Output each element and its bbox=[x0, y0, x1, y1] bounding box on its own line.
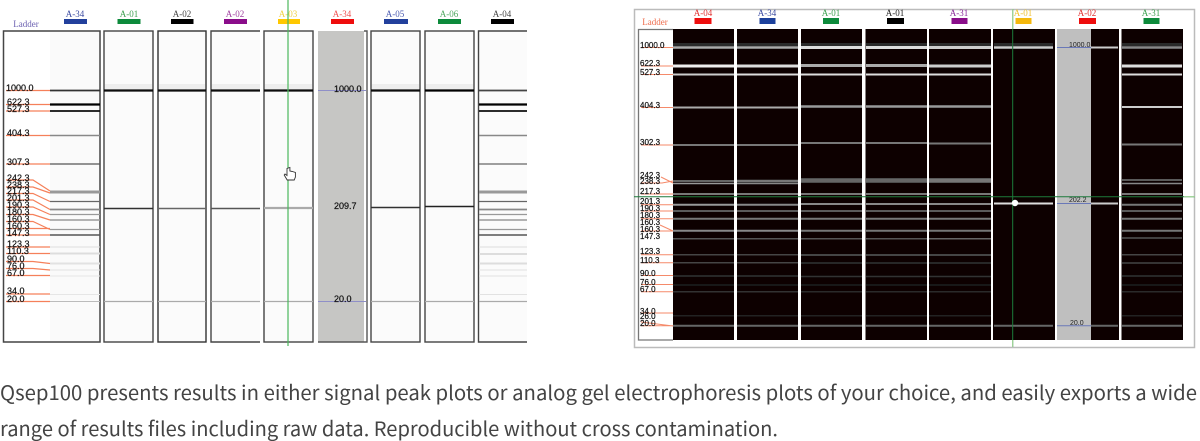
lane header A-06 green: A-06 bbox=[440, 9, 459, 19]
lane: dark A-31 purple bbox=[929, 29, 991, 340]
size labels and leader lines: 190.3 bbox=[7, 200, 30, 210]
ladder box with size labels: 404.3 bbox=[640, 101, 661, 110]
icon: cursor marker dot bbox=[1012, 200, 1018, 206]
lane: A-04 black ladder bbox=[478, 31, 527, 342]
lane header A-04 red: A-04 bbox=[694, 8, 713, 18]
ladder heading: Ladder bbox=[13, 19, 39, 29]
size labels and leader lines: 622.3 bbox=[7, 97, 30, 107]
lane header A-34 blue: A-34 bbox=[66, 9, 85, 19]
lane header A-02 purple: A-02 bbox=[226, 9, 244, 19]
size labels and leader lines: 90.0 bbox=[7, 254, 25, 264]
lane header A-34 blue bbox=[758, 8, 777, 24]
ladder box with size labels: 160.3 bbox=[640, 218, 661, 227]
cursor line: green vertical bbox=[287, 0, 289, 346]
size labels and leader lines: 160.3 bbox=[7, 214, 30, 224]
lane header A-34 red bbox=[331, 9, 354, 24]
ladder box with size labels: 76.0 bbox=[640, 278, 656, 287]
lane header A-06 green bbox=[438, 9, 461, 24]
lane header A-01 yellow: A-01 bbox=[1014, 8, 1032, 18]
lane header A-34 blue bbox=[64, 9, 87, 24]
lane: selected A-02 red with size markers: 202.2 bbox=[1069, 197, 1087, 204]
ladder box with size labels: 34.0 bbox=[640, 307, 656, 316]
size labels and leader lines: 20.0 bbox=[7, 294, 25, 304]
lane header A-01 black: A-01 bbox=[886, 8, 904, 18]
lane: dark A-01 yellow bbox=[993, 29, 1055, 340]
size labels and leader lines: 180.3 bbox=[7, 207, 30, 217]
lane header A-04 black bbox=[491, 9, 514, 24]
lane header A-01 green: A-01 bbox=[822, 8, 840, 18]
ladder box with size labels: 217.3 bbox=[640, 187, 661, 196]
size labels and leader lines: 527.3 bbox=[7, 104, 30, 114]
panel frame bbox=[634, 10, 1194, 348]
ladder box with size labels: 527.3 bbox=[640, 68, 661, 77]
lane header A-02 black: A-02 bbox=[173, 9, 191, 19]
size labels and leader lines: 67.0 bbox=[7, 268, 25, 278]
size labels and leader lines: 217.3 bbox=[7, 186, 30, 196]
lane header A-01 green bbox=[822, 8, 840, 24]
lane header A-02 purple bbox=[224, 9, 247, 24]
panel: dark gel view bbox=[634, 8, 1195, 348]
lane header A-34 blue: A-34 bbox=[758, 8, 777, 18]
size labels and leader lines: 1000.0 bbox=[6, 83, 34, 93]
panel: white gel view bbox=[4, 0, 527, 346]
size labels and leader lines: 201.3 bbox=[7, 193, 30, 203]
ladder box with size labels: 160.3 bbox=[640, 225, 661, 234]
ladder box with size labels: 26.0 bbox=[640, 312, 656, 321]
lane header A-04 red bbox=[694, 8, 713, 24]
lane header A-02 red: A-02 bbox=[1078, 8, 1096, 18]
lane: A-06 green bbox=[425, 31, 474, 342]
ladder box with size labels: 110.3 bbox=[640, 256, 660, 265]
size labels and leader lines: 147.3 bbox=[7, 228, 30, 238]
lane header A-05 blue: A-05 bbox=[386, 9, 405, 19]
lane header A-31 green: A-31 bbox=[1142, 8, 1160, 18]
ladder box with size labels bbox=[638, 30, 673, 340]
ladder box with size labels: 147.3 bbox=[640, 232, 661, 241]
caption text bbox=[0, 377, 1197, 441]
ladder box with size labels: 67.0 bbox=[640, 285, 656, 294]
size labels and leader lines: 238.3 bbox=[7, 180, 30, 190]
lane header A-03 yellow bbox=[278, 9, 300, 24]
lane header A-03 yellow: A-03 bbox=[279, 9, 298, 19]
size labels and leader lines: 242.3 bbox=[7, 173, 30, 183]
lane: dark A-01 green bbox=[801, 29, 862, 340]
lane: ladder A-34 bbox=[4, 31, 100, 342]
lane: selected A-02 red with size markers: 20.0 bbox=[1070, 320, 1084, 327]
ladder box with size labels: 20.0 bbox=[640, 319, 656, 328]
lane header A-01 yellow bbox=[1014, 8, 1032, 24]
lane header A-31 purple: A-31 bbox=[950, 8, 968, 18]
ladder box with size labels: 1000.0 bbox=[640, 41, 665, 50]
lane: selected A-34 red with size markers: 209.7 bbox=[334, 201, 357, 211]
size labels and leader lines: 34.0 bbox=[7, 286, 25, 296]
lane: A-05 blue bbox=[371, 31, 420, 342]
size labels and leader lines: 404.3 bbox=[7, 128, 30, 138]
size labels and leader lines: 76.0 bbox=[7, 261, 25, 271]
lane header A-01 green: A-01 bbox=[120, 9, 138, 19]
ladder box with size labels: 302.3 bbox=[640, 138, 661, 147]
size labels and leader lines: 123.3 bbox=[7, 239, 30, 249]
lane header A-01 green bbox=[118, 9, 140, 24]
size labels and leader lines: 160.3 bbox=[7, 221, 30, 231]
size labels and leader lines: 307.3 bbox=[7, 157, 30, 167]
lane header A-34 red: A-34 bbox=[333, 9, 352, 19]
lane header A-31 purple bbox=[950, 8, 968, 24]
size labels and leader lines bbox=[6, 83, 50, 304]
lane: selected A-34 red with size markers: 1000.0 bbox=[334, 84, 362, 94]
lane: dark A-34 bbox=[737, 29, 798, 340]
lane: selected A-34 red with size markers bbox=[318, 31, 367, 342]
lane: A-02 purple bbox=[211, 31, 260, 342]
size labels and leader lines: 110.3 bbox=[7, 246, 29, 256]
lane: A-01 green bbox=[104, 31, 153, 342]
lane header A-31 green bbox=[1142, 8, 1160, 24]
ladder box with size labels: 190.3 bbox=[640, 204, 661, 213]
lane: dark A-31 green bbox=[1122, 29, 1183, 340]
ladder box with size labels: 238.3 bbox=[640, 177, 661, 186]
lane: dark A-01 black bbox=[866, 29, 927, 340]
lane: selected A-02 red with size markers bbox=[1057, 29, 1119, 340]
lane header A-04 black: A-04 bbox=[493, 9, 512, 19]
lane: A-03 yellow bbox=[264, 31, 313, 342]
caption text: Qsep100 presents results in either signal peak plots or analog gel electrophoresis plots of your choice, and easily exports a wide bbox=[0, 377, 1197, 406]
ladder box with size labels: 180.3 bbox=[640, 211, 661, 220]
crosshair: green cursor lines bbox=[634, 9, 1195, 347]
ladder heading: Ladder bbox=[642, 17, 668, 27]
lane: selected A-02 red with size markers: 1000.0 bbox=[1069, 42, 1091, 49]
lane: selected A-34 red with size markers: 20.0 bbox=[334, 294, 352, 304]
ladder box with size labels: 201.3 bbox=[640, 197, 661, 206]
lane header A-05 blue bbox=[384, 9, 408, 24]
ladder box with size labels: 123.3 bbox=[640, 247, 661, 256]
lane: dark A-04 bbox=[673, 29, 734, 340]
ladder box with size labels: 242.3 bbox=[640, 171, 661, 180]
ladder box with size labels: 90.0 bbox=[640, 269, 656, 278]
lane header A-02 black bbox=[171, 9, 194, 24]
ladder box with size labels: 622.3 bbox=[640, 59, 661, 68]
icon: hand cursor bbox=[284, 168, 295, 180]
lane header A-01 black bbox=[886, 8, 904, 24]
lane: A-02 black bbox=[158, 31, 206, 342]
lane header A-02 red bbox=[1078, 8, 1096, 24]
